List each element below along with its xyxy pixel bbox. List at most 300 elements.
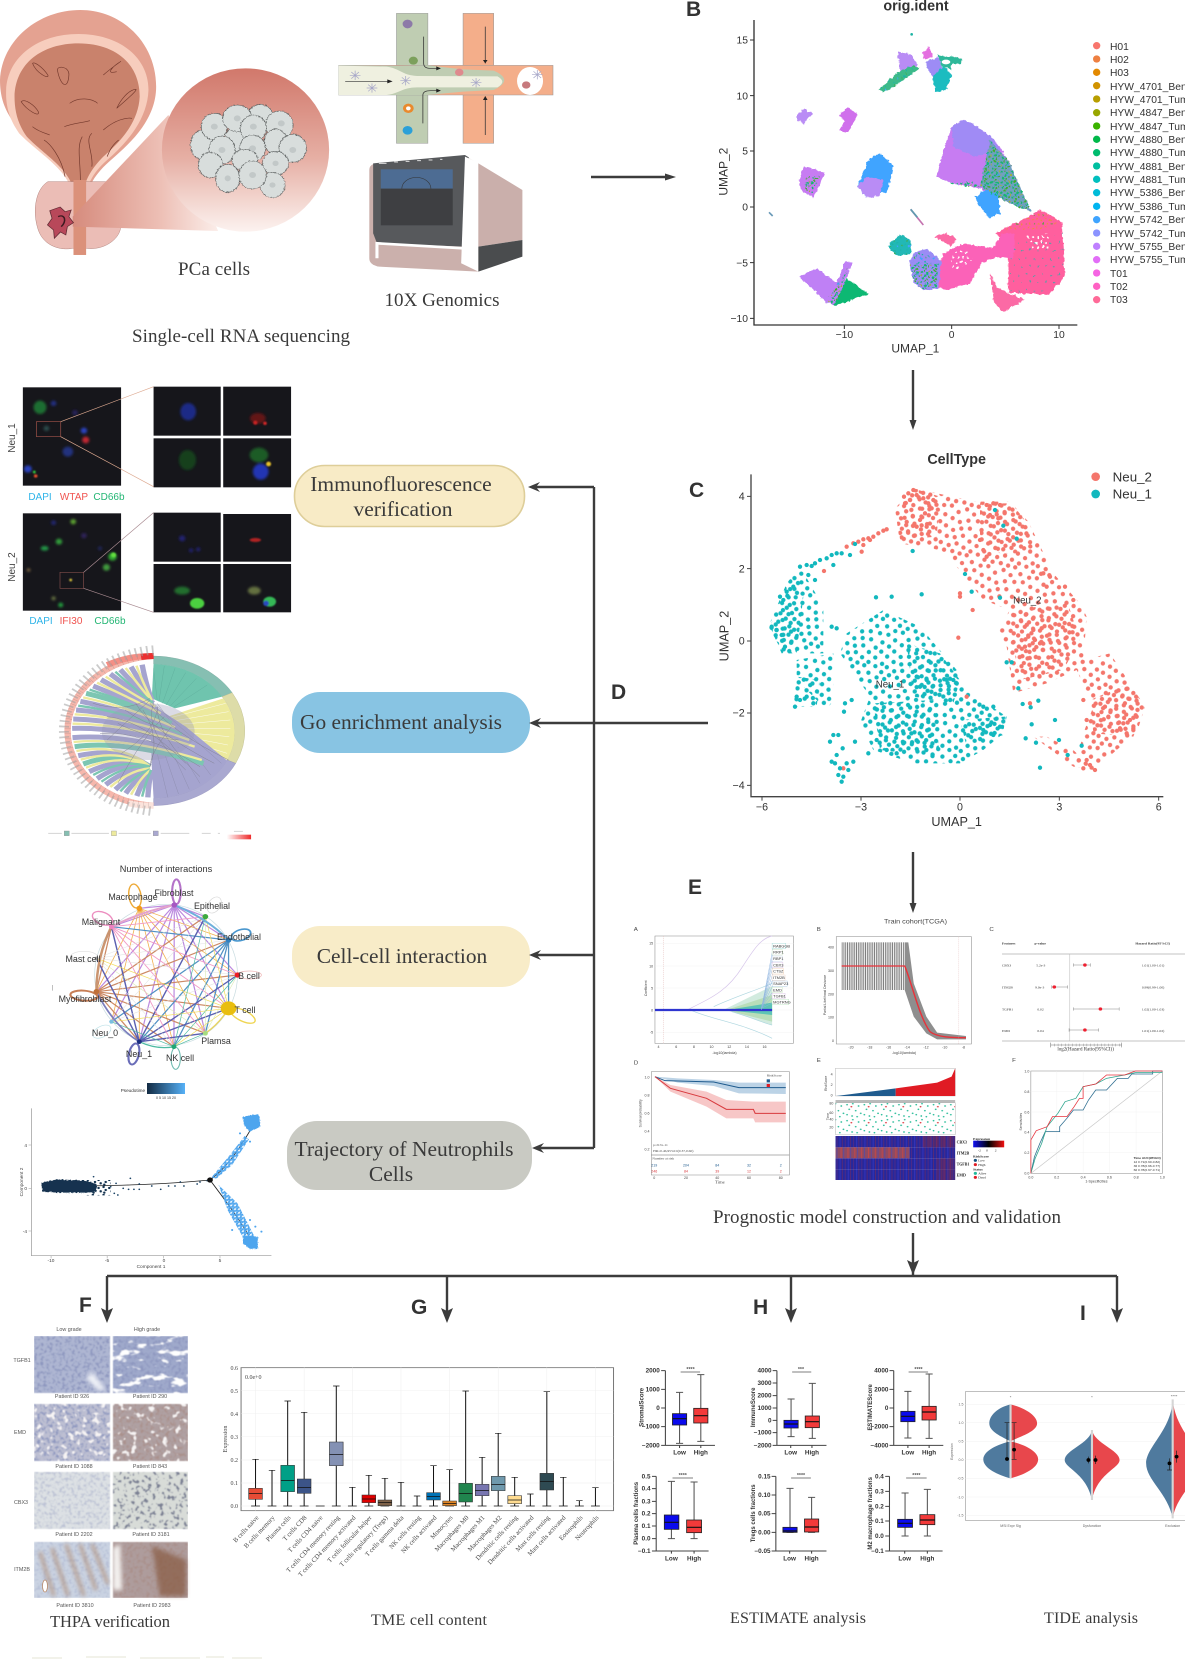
plot D: survival curves: 2 <box>780 1163 782 1167</box>
labels: THPA rows and patients: Patient ID 290 <box>133 1394 167 1400</box>
chart: ESTIMATE and immune fraction boxplots: 4000 <box>757 1368 772 1375</box>
chart: ESTIMATE and immune fraction boxplots: High <box>687 1555 701 1562</box>
labels: trajectory axes: -10 <box>48 1258 55 1264</box>
plot D: survival curves: 246 <box>651 1169 657 1173</box>
chart: UMAP CellType: Neu_1 <box>1113 487 1152 502</box>
plot B: partial likelihood deviance: -14 <box>905 1046 910 1050</box>
legend: orig.ident samples: T01 <box>1110 269 1128 280</box>
plot D: survival curves: 60 <box>747 1176 751 1180</box>
caption: Single-cell RNA sequencing: Single-cell RNA sequencing <box>132 326 350 347</box>
chart: ESTIMATE and immune fraction boxplots: 0.3 <box>875 1488 884 1495</box>
plot A: LASSO coefficients: CBX3 <box>773 963 783 967</box>
arrows: D bus to analysis pills <box>528 482 708 1153</box>
chart: ESTIMATE and immune fraction boxplots: **** <box>912 1473 921 1479</box>
plot C: forest plot: Features <box>1002 942 1016 946</box>
pill: Trajectory of Neutrophils Cells: Cells <box>369 1162 413 1186</box>
chart: ESTIMATE and immune fraction boxplots: High <box>694 1449 708 1456</box>
panel: THPA tissue images <box>34 1336 188 1598</box>
plot E: risk score, status and heatmap: CBX3 <box>957 1141 967 1145</box>
chart: TME cell content boxplot: Dendritic cells activated <box>487 1514 536 1566</box>
labels: trajectory axes: -5 <box>105 1258 109 1264</box>
chart: UMAP orig.ident: 5 <box>742 147 748 158</box>
chart: ESTIMATE and immune fraction boxplots: −2000 <box>642 1442 660 1449</box>
plot E: risk score, status and heatmap: 0 <box>986 1149 988 1153</box>
plot D: survival curves: p=9.7e-11 <box>653 1143 668 1147</box>
labels: network cell types: B cell <box>238 971 260 981</box>
plot D: survival curves: 0.2 <box>645 1147 650 1151</box>
illustration: microfluidic chip <box>339 13 553 143</box>
plot D: survival curves: 84 <box>684 1169 688 1173</box>
labels: THPA rows and patients: Patient ID 2202 <box>55 1532 93 1538</box>
plot A: LASSO coefficients: TGFB1 <box>773 994 786 998</box>
plot B: partial likelihood deviance: 0 <box>832 1039 834 1043</box>
labels: trajectory axes: 4 <box>24 1143 27 1149</box>
chart: TME cell content boxplot: Macrophages M1 <box>450 1515 486 1553</box>
plot D: survival curves: Survival probability <box>639 1099 643 1127</box>
chart: ESTIMATE and immune fraction boxplots: 0 <box>885 1405 889 1412</box>
arrow: CellType to model <box>910 852 916 913</box>
chart: ESTIMATE and immune fraction boxplots: StromalScore <box>638 1387 646 1427</box>
chart: UMAP orig.ident: −5 <box>736 258 748 269</box>
panel: prognostic model plots: E <box>817 1058 821 1064</box>
labels: THPA rows and patients: Patient ID 1088 <box>55 1464 93 1470</box>
caption: Prognostic model construction and validation: Prognostic model construction and validation <box>713 1207 1062 1228</box>
plot A: LASSO coefficients: 6 <box>675 1045 677 1049</box>
plot A: LASSO coefficients: 14 <box>745 1045 749 1049</box>
plot D: survival curves: 32 <box>747 1163 751 1167</box>
plot A: LASSO coefficients: Coefficient <box>644 980 648 996</box>
chart: TME cell content boxplot: Mast cells activated <box>527 1514 568 1558</box>
chart: ESTIMATE and immune fraction boxplots: Low <box>783 1555 796 1562</box>
labels: network cell types: Mast cell <box>65 954 101 964</box>
plot C: forest plot: 9.0e-3 <box>1035 986 1045 990</box>
legend: orig.ident samples: T03 <box>1110 295 1128 306</box>
chart: ESTIMATE and immune fraction boxplots: 0.15 <box>758 1473 771 1480</box>
chart: UMAP orig.ident: 0 <box>949 330 955 341</box>
caption: PCa cells: PCa cells <box>178 259 250 280</box>
chart: TIDE violin plot: Expression <box>950 1443 954 1460</box>
labels: THPA rows and patients: ITM2B <box>14 1567 30 1573</box>
arrows: model to downstream analyses <box>101 1233 1123 1323</box>
chart: TIDE violin plot <box>950 1391 1185 1528</box>
plot E: risk score, status and heatmap: 4 <box>831 1073 833 1077</box>
caption: 10X Genomics: 10X Genomics <box>384 290 500 311</box>
chart: TIDE violin plot: -1.5 <box>957 1514 964 1518</box>
chart: UMAP orig.ident: UMAP_2 <box>717 147 731 196</box>
chart: TIDE violin plot: * <box>1010 1394 1012 1399</box>
caption: ESTIMATE analysis: ESTIMATE analysis <box>730 1610 866 1627</box>
label G: G <box>411 1296 427 1319</box>
label E: E <box>688 876 702 899</box>
chart: UMAP orig.ident: −10 <box>730 314 748 325</box>
caption: THPA verification: THPA verification <box>50 1612 170 1631</box>
labels: network cell types: T cell <box>234 1005 256 1015</box>
plot B: partial likelihood deviance: 300 <box>828 969 834 973</box>
panel: prognostic model plots: F <box>1012 1058 1016 1064</box>
labels: THPA rows and patients: EMD <box>14 1430 26 1436</box>
labels: trajectory axes: Component 1 <box>137 1264 166 1270</box>
plot E: risk score, status and heatmap: Dead <box>978 1176 986 1180</box>
labels: THPA rows and patients: Patient ID 3181 <box>132 1532 170 1538</box>
plot B: partial likelihood deviance: Partial Likelihood Deviance <box>823 975 827 1015</box>
chart: TIDE violin plot: 0.5 <box>959 1440 964 1444</box>
chart: ESTIMATE and immune fraction boxplots: −1000 <box>642 1424 660 1431</box>
chart: UMAP orig.ident: UMAP_1 <box>891 342 940 356</box>
plot F: ROC curves <box>1019 1069 1165 1184</box>
labels: THPA rows and patients: Low grade <box>56 1327 82 1333</box>
labels: immunofluorescence markers: IFI30 <box>60 616 83 627</box>
chart: ESTIMATE and immune fraction boxplots: −0.1 <box>638 1548 651 1555</box>
chart: TIDE violin plot: 1.0 <box>959 1421 964 1425</box>
pill: Go enrichment analysis <box>292 692 530 753</box>
plot F: ROC curves: Time AUC(95%CI) <box>1134 1156 1161 1160</box>
plot D: survival curves: 0.4 <box>645 1129 650 1133</box>
chart: ESTIMATE and immune fraction boxplots: Low <box>673 1449 686 1456</box>
chart: UMAP CellType: −6 <box>756 802 768 814</box>
chart: UMAP orig.ident: 10 <box>736 91 748 102</box>
chart: ESTIMATE and immune fraction boxplots: **** <box>686 1367 695 1373</box>
plot D: survival curves: 0 <box>653 1176 655 1180</box>
chart: TME cell content boxplot: Macrophages M0 <box>434 1514 471 1553</box>
plot A: LASSO coefficients: 10 <box>710 1045 714 1049</box>
plot E: risk score, status and heatmap <box>824 1068 1004 1180</box>
plot F: ROC curves: 1.0 <box>1024 1069 1029 1073</box>
plot C: forest plot: p-value <box>1034 942 1046 946</box>
plot D: survival curves: 0.8 <box>645 1093 650 1097</box>
chart: TIDE violin plot: Exclusion <box>1165 1524 1180 1528</box>
plot E: risk score, status and heatmap: 40 <box>829 1118 833 1122</box>
chart: UMAP orig.ident: 10 <box>1053 330 1065 341</box>
chart: ESTIMATE and immune fraction boxplots: M2 macrophage fractions <box>867 1477 874 1550</box>
chart: ESTIMATE and immune fraction boxplots: 0 <box>656 1405 660 1412</box>
plot E: risk score, status and heatmap: ITM2B <box>957 1152 970 1156</box>
chart: UMAP CellType: 4 <box>739 491 745 503</box>
chart: ESTIMATE and immune fraction boxplots: 2000 <box>874 1386 889 1393</box>
labels: THPA rows and patients: High grade <box>134 1327 160 1333</box>
chart: UMAP CellType: 0 <box>957 802 963 814</box>
plot C: forest plot: 1.01(1.00-1.01) <box>1142 964 1164 968</box>
labels: immunofluorescence markers: CD66b <box>94 616 126 627</box>
labels: immunofluorescence markers <box>7 423 126 627</box>
plot A: LASSO coefficients: 4 <box>658 1045 660 1049</box>
plot F: ROC curves: 0.8 <box>1134 1175 1139 1179</box>
pill: Cell-cell interaction: Cell-cell interaction <box>317 944 488 968</box>
plot C: forest plot <box>1002 942 1185 1053</box>
labels: immunofluorescence markers: WTAP <box>60 492 88 503</box>
plot F: ROC curves: 0.2 <box>1054 1175 1059 1179</box>
labels: trajectory axes: 5 <box>219 1258 222 1264</box>
panel: immunofluorescence images <box>23 387 291 612</box>
chart: TIDE violin plot: 1.5 <box>959 1403 964 1407</box>
chart: TME cell content boxplot: Eosinophils <box>558 1514 585 1542</box>
legend: orig.ident samples: HYW_4701_Ben <box>1110 82 1185 93</box>
plot E: risk score, status and heatmap: 0 <box>831 1094 833 1098</box>
plot C: forest plot: TGFB1 <box>1002 1008 1013 1012</box>
chart: ESTIMATE and immune fraction boxplots: 1000 <box>646 1386 660 1393</box>
chart: ESTIMATE and immune fraction boxplots: ImmuneScore <box>750 1387 757 1427</box>
labels: THPA rows and patients: Patient ID 2983 <box>133 1603 171 1609</box>
chart: ESTIMATE and immune fraction boxplots: 0.05 <box>758 1511 771 1518</box>
chart: ESTIMATE and immune fraction boxplots: **** <box>679 1473 687 1479</box>
labels: immunofluorescence markers: DAPI <box>29 616 53 627</box>
panel: prognostic model plots: Train cohort(TCGA) <box>884 919 947 925</box>
plot B: partial likelihood deviance: -12 <box>923 1046 929 1050</box>
labels: network cell types: Neu_1 <box>126 1049 152 1059</box>
chart: TME cell content boxplot: Monocytes <box>429 1514 455 1541</box>
chart: ESTIMATE and immune fraction boxplots: Low <box>898 1555 911 1562</box>
chart: TME cell content boxplot: 0.5 <box>230 1389 238 1395</box>
chart: TME cell content boxplot: Expression <box>223 1426 229 1452</box>
chart: TME cell content boxplot: 0.2 <box>230 1458 238 1464</box>
panel: prognostic model plots: C <box>989 927 995 933</box>
labels: THPA rows and patients: TGFB1 <box>13 1358 31 1364</box>
plot E: risk score, status and heatmap: EMD <box>957 1174 966 1178</box>
chart: UMAP CellType: 3 <box>1056 802 1062 814</box>
plot A: LASSO coefficients: CTSZ <box>773 970 784 974</box>
chart: UMAP CellType: 0 <box>739 636 745 648</box>
plot B: partial likelihood deviance: -18 <box>867 1046 872 1050</box>
caption: TME cell content: TME cell content <box>371 1612 488 1629</box>
chart: ESTIMATE and immune fraction boxplots: −4000 <box>871 1442 889 1449</box>
chart: TME cell content boxplot: 0.4 <box>230 1412 238 1418</box>
chart: ESTIMATE and immune fraction boxplots: 0.2 <box>642 1511 651 1518</box>
labels: network cell types: Number of interactions <box>120 864 213 874</box>
pill: Immunofluorescence verification: verification <box>353 497 453 521</box>
plot D: survival curves: Time <box>715 1179 725 1184</box>
chart: UMAP CellType: Neu_2 <box>1113 469 1152 484</box>
plot F: ROC curves: 60 0.78(0.67-0.71) <box>1134 1168 1160 1172</box>
chart: UMAP CellType: −4 <box>733 780 745 792</box>
chart: ESTIMATE and immune fraction boxplots: 0.1 <box>875 1518 884 1525</box>
chart: TME cell content boxplot: 0.3 <box>230 1435 238 1441</box>
chart: ESTIMATE and immune fraction boxplots: **** <box>914 1367 923 1373</box>
plot D: survival curves: HR=0.46,95%CI(0.37,0.60) <box>653 1149 694 1154</box>
chart: TIDE violin plot: MSI Expr Sig <box>1000 1524 1021 1528</box>
plot F: ROC curves: 0.4 <box>1081 1175 1086 1179</box>
chart: ESTIMATE and immune fraction boxplots: 2000 <box>646 1368 660 1375</box>
chart: ESTIMATE and immune fraction boxplots: −0.05 <box>754 1548 771 1555</box>
chart: GO chord diagram <box>48 650 251 839</box>
chart: ESTIMATE and immune fraction boxplots: −2000 <box>871 1424 889 1431</box>
panel: prognostic model plots: D <box>634 1061 638 1067</box>
plot C: forest plot: 0.04 <box>1037 1029 1044 1033</box>
plot B: partial likelihood deviance: -20 <box>848 1046 854 1050</box>
chart: ESTIMATE and immune fraction boxplots: 0.4 <box>642 1486 651 1493</box>
panel: prognostic model plots: B <box>817 927 821 933</box>
chart: ESTIMATE and immune fraction boxplots: Low <box>902 1449 914 1456</box>
plot B: partial likelihood deviance: 100 <box>828 1016 834 1020</box>
plot C: forest plot: EMD <box>1002 1029 1011 1033</box>
plot E: risk score, status and heatmap: High <box>978 1163 986 1167</box>
labels: network cell types: NK cell <box>166 1053 194 1063</box>
chart: TME cell content boxplot: T cells CD4 naive <box>287 1515 325 1554</box>
chart: UMAP CellType <box>717 452 1163 829</box>
arrow: UMAP to CellType <box>910 370 916 430</box>
chart: UMAP orig.ident: 0 <box>742 203 748 214</box>
plot C: forest plot: 5.2e-3 <box>1036 964 1046 968</box>
plot E: risk score, status and heatmap: 2 <box>831 1083 833 1087</box>
plot C: forest plot: 1.02(1.00-1.03) <box>1142 1008 1164 1012</box>
chart: TME cell content boxplot: NK cells activated <box>400 1514 439 1555</box>
faint clipped line at bottom edge <box>32 1657 262 1658</box>
labels: network cell types: Malignant <box>82 917 121 927</box>
chart: TME cell content boxplot: 0.1 <box>230 1481 238 1487</box>
chart: ESTIMATE and immune fraction boxplots: 0.2 <box>875 1503 884 1510</box>
chart: TME cell content boxplot: NK cells resting <box>388 1514 423 1551</box>
chart: UMAP CellType: −2 <box>733 708 745 720</box>
illustration: bladder, prostate and magnified PCa cells <box>0 10 329 255</box>
legend: orig.ident samples: H03 <box>1110 68 1129 79</box>
legend: orig.ident samples: HYW_5742_Ben <box>1110 215 1185 226</box>
labels: immunofluorescence markers: Neu_1 <box>7 423 18 453</box>
plot D: survival curves: 20 <box>684 1176 688 1180</box>
labels: THPA rows and patients: CBX3 <box>14 1500 28 1506</box>
plot B: partial likelihood deviance: -8 <box>962 1046 965 1050</box>
plot F: ROC curves: 0.8 <box>1024 1090 1029 1094</box>
chart: TME cell content boxplot: T cells CD8 <box>282 1514 309 1543</box>
plot E: risk score, status and heatmap: RiskScore <box>973 1154 989 1158</box>
plot D: survival curves: 2 <box>780 1169 782 1173</box>
plot D: survival curves: Number at risk <box>652 1157 674 1161</box>
label D: D <box>611 681 626 704</box>
plot F: ROC curves: 0.6 <box>1107 1175 1112 1179</box>
plot D: survival curves: 1.0 <box>645 1076 650 1080</box>
plot F: ROC curves: Sensitivities <box>1019 1113 1023 1130</box>
chart: TIDE violin plot: -0.5 <box>957 1477 964 1481</box>
label C: C <box>689 479 704 502</box>
legend: orig.ident samples: HYW_5386_Ben <box>1110 188 1185 199</box>
chart: ESTIMATE and immune fraction boxplots: Tregs cells fractions <box>750 1484 757 1542</box>
plot F: ROC curves: 12 0.71(0.60-0.82) <box>1134 1160 1160 1164</box>
chart: ESTIMATE and immune fraction boxplots: High <box>920 1555 935 1562</box>
chart: TME cell content boxplot: T cells CD4 memory activated <box>297 1514 358 1578</box>
chart: UMAP orig.ident <box>717 0 1077 356</box>
chart: TME cell content boxplot: T cells follicular helper <box>326 1514 374 1564</box>
plot C: forest plot: 1.01(1.00-1.02) <box>1142 1029 1164 1033</box>
chart: ESTIMATE and immune fraction boxplots: 0.0 <box>875 1533 884 1540</box>
plot B: partial likelihood deviance: 200 <box>828 992 834 996</box>
plot B: partial likelihood deviance: -log10(lambda) <box>892 1051 916 1055</box>
chart: TME cell content boxplot: Plasma cells <box>265 1514 293 1543</box>
plot C: forest plot: 0.99(0.99-1.00) <box>1142 986 1164 990</box>
chart: ESTIMATE and immune fraction boxplots: −2000 <box>754 1442 772 1449</box>
plot C: forest plot: CBX3 <box>1002 964 1012 968</box>
labels: network cell types: Macrophage <box>108 892 158 902</box>
chart: ESTIMATE and immune fraction boxplots: ESTIMATEScore <box>867 1384 874 1431</box>
plot A: LASSO coefficients: 15 <box>649 942 653 946</box>
plot B: partial likelihood deviance: 400 <box>828 946 834 950</box>
plot E: risk score, status and heatmap: Low <box>978 1159 985 1163</box>
chart: ESTIMATE and immune fraction boxplots: High <box>805 1449 819 1456</box>
caption: TIDE analysis: TIDE analysis <box>1044 1610 1138 1627</box>
labels: network cell types: Myofibroblast <box>59 994 112 1004</box>
label H: H <box>753 1296 768 1319</box>
chart: UMAP CellType: UMAP_2 <box>717 611 731 661</box>
plot E: risk score, status and heatmap: -2 <box>978 1149 981 1153</box>
chart: TIDE violin plot: * <box>1091 1394 1093 1399</box>
chart: TME cell content boxplot: Mast cells resting <box>515 1514 552 1553</box>
labels: trajectory axes: 0 <box>24 1186 27 1192</box>
chart: UMAP orig.ident: 15 <box>736 36 748 47</box>
plot B: partial likelihood deviance: -10 <box>942 1046 947 1050</box>
chart: ESTIMATE and immune fraction boxplots: **** <box>797 1473 805 1479</box>
chart: TME cell content boxplot: Macrophages M2 <box>467 1515 503 1553</box>
plot D: survival curves: 80 <box>779 1176 783 1180</box>
plot F: ROC curves: 0.2 <box>1024 1151 1029 1155</box>
plot A: LASSO coefficients: RABGGB <box>773 944 791 948</box>
chart: TME cell content boxplot: Neutrophils <box>574 1514 601 1542</box>
legend: orig.ident samples: HYW_5755_Ben <box>1110 242 1185 253</box>
labels: immunofluorescence markers: DAPI <box>28 492 52 503</box>
pill: Trajectory of Neutrophils Cells: Trajectory of Neutrophils <box>295 1137 513 1161</box>
labels: THPA rows and patients: Patient ID 926 <box>55 1394 89 1400</box>
plot D: survival curves: 12 <box>747 1169 751 1173</box>
plot A: LASSO coefficients: SNAP23 <box>773 982 788 986</box>
plot E: risk score, status and heatmap: 2 <box>995 1149 997 1153</box>
legend: orig.ident samples: HYW_4847_Ben <box>1110 108 1185 119</box>
chart: ESTIMATE and immune fraction boxplots: 0.3 <box>642 1498 651 1505</box>
plot A: LASSO coefficients: RBP1 <box>773 957 783 961</box>
plot C: forest plot: log2(Hazard Ratio(95%CI)) <box>1057 1048 1114 1053</box>
labels: trajectory axes <box>19 1143 222 1270</box>
plot A: LASSO coefficients: MGTRNG <box>773 1000 791 1004</box>
plot F: ROC curves: 0.0 <box>1028 1175 1033 1179</box>
legend: orig.ident samples: HYW_4880_Ben <box>1110 135 1185 146</box>
labels: immunofluorescence markers: CD66b <box>93 492 125 503</box>
plot E: risk score, status and heatmap: Status <box>973 1167 983 1171</box>
pill: Immunofluorescence verification <box>294 466 524 526</box>
chart: ESTIMATE and immune fraction boxplots <box>633 1367 943 1562</box>
plot B: partial likelihood deviance <box>823 937 971 1055</box>
legend: orig.ident samples <box>1093 42 1185 306</box>
chart: cell-cell interaction network <box>52 879 261 1069</box>
plot A: LASSO coefficients: 0 <box>651 1008 653 1012</box>
chart: TME cell content boxplot: T cells regulatory (Tregs) <box>339 1515 389 1569</box>
plot B: partial likelihood deviance: -16 <box>886 1046 891 1050</box>
label F: F <box>79 1294 92 1317</box>
panel: prognostic model plots <box>634 919 1185 1184</box>
plot A: LASSO coefficients: EMD <box>773 988 782 992</box>
labels: THPA rows and patients: Patient ID 3810 <box>56 1603 94 1609</box>
label I: I <box>1080 1302 1086 1325</box>
labels: network cell types: Plamsa <box>201 1036 231 1046</box>
legend: pseudotime: Pseudotime <box>121 1088 145 1093</box>
chart: ESTIMATE and immune fraction boxplots: −0.1 <box>871 1548 884 1555</box>
chart: ESTIMATE and immune fraction boxplots: 0.1 <box>642 1523 651 1530</box>
illustration: 10X Genomics instrument <box>369 155 522 272</box>
plot E: risk score, status and heatmap: 60 <box>829 1111 833 1115</box>
chart: ESTIMATE and immune fraction boxplots: 0 <box>768 1417 772 1424</box>
arrow: sequencing to UMAP <box>591 174 676 180</box>
chart: UMAP orig.ident: −10 <box>836 330 853 341</box>
chart: UMAP CellType: 2 <box>739 563 745 575</box>
chart: TME cell content boxplot: B cells naive <box>232 1515 261 1544</box>
chart: UMAP CellType: 6 <box>1156 802 1162 814</box>
chart: ESTIMATE and immune fraction boxplots: Low <box>665 1555 678 1562</box>
chart: ESTIMATE and immune fraction boxplots: −1000 <box>754 1430 772 1437</box>
plot E: risk score, status and heatmap: Expression <box>973 1137 990 1141</box>
plot A: LASSO coefficients: -5 <box>650 1031 653 1035</box>
plot A: LASSO coefficients: RRP1 <box>773 951 784 955</box>
legend: orig.ident samples: T02 <box>1110 282 1128 293</box>
labels: trajectory axes: -4 <box>23 1229 27 1235</box>
chart: ESTIMATE and immune fraction boxplots: 3000 <box>757 1380 772 1387</box>
chart: TME cell content boxplot: T cells gamma delta <box>364 1515 406 1558</box>
chart: ESTIMATE and immune fraction boxplots: 0.4 <box>875 1473 884 1480</box>
plot F: ROC curves: 1-Specificities <box>1085 1180 1108 1184</box>
labels: network cell types: Fibroblast <box>155 888 194 898</box>
plot F: ROC curves: 0.0 <box>1024 1171 1029 1175</box>
